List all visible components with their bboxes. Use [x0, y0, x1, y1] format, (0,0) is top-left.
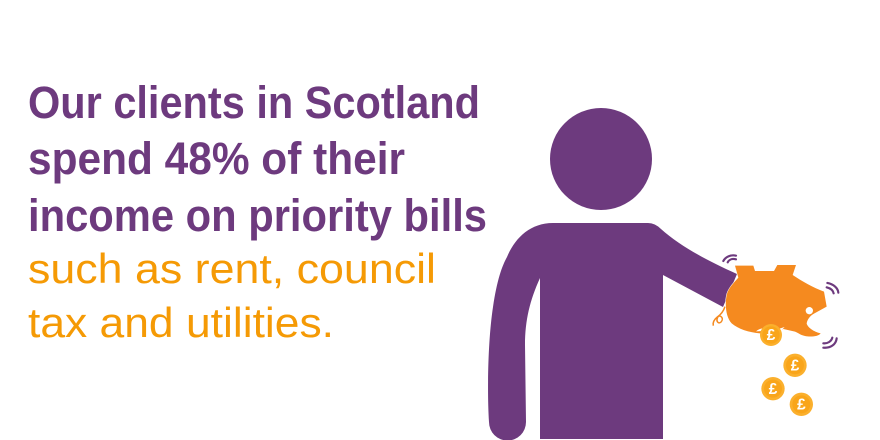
piggy bank eye [806, 307, 813, 314]
person figure [488, 108, 737, 440]
coin: £ [769, 381, 778, 398]
coin: £ [797, 397, 806, 414]
headline text: income on priority bills [28, 190, 487, 241]
piggy bank body [726, 265, 827, 336]
headline text: spend 48% of their [28, 133, 405, 184]
person body and arms [488, 223, 737, 440]
headline text [28, 77, 487, 241]
icon: falling coins [761, 354, 813, 416]
coin in slot: £ [767, 327, 776, 344]
headline text: Our clients in Scotland [28, 77, 480, 128]
supporting text: such as rent, council [28, 245, 436, 292]
supporting text [28, 245, 436, 346]
motion lines [723, 255, 838, 348]
coin slot gaps [756, 327, 785, 331]
person head [550, 108, 652, 210]
supporting text: tax and utilities. [28, 299, 334, 346]
piggy bank tail [713, 307, 725, 326]
coin: £ [791, 358, 800, 375]
icon: broken piggy bank [713, 255, 838, 348]
